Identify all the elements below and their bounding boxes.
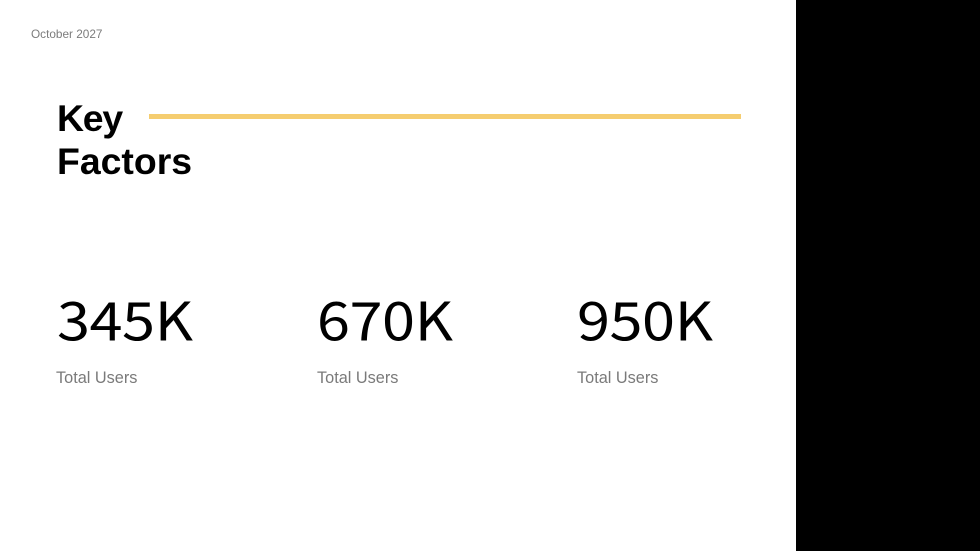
title <box>57 97 192 182</box>
stat: 950K: 950K <box>577 279 713 357</box>
stat label: 670K: Total Users <box>317 369 398 387</box>
stat label: 950K: Total Users <box>577 369 658 387</box>
stat label: 345K: Total Users <box>56 369 137 387</box>
stat: 345K: 345K <box>57 279 193 357</box>
black side panel <box>796 0 980 551</box>
stat: 670K: 670K <box>317 279 453 357</box>
date label: October 2027 <box>31 27 102 41</box>
accent line <box>149 114 741 119</box>
title: Factors <box>57 140 192 182</box>
title: Key <box>57 97 122 139</box>
